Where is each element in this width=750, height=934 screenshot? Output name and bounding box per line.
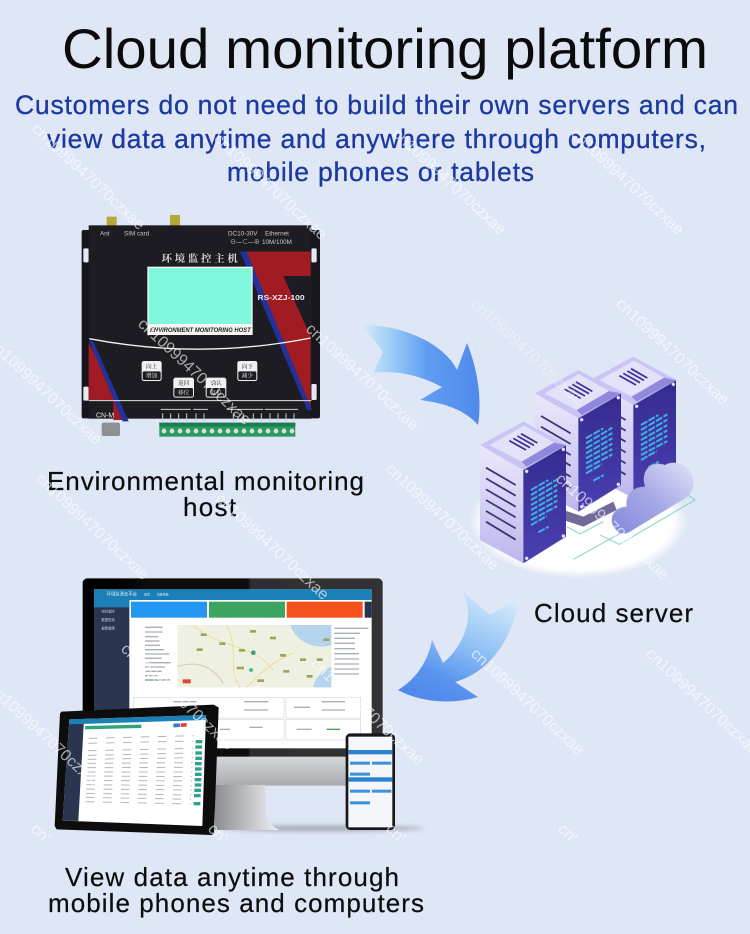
CN-M connector label: CN-M: [96, 412, 114, 419]
port labels: SIM card: [124, 230, 150, 237]
tablet: [55, 705, 219, 835]
watermarks: cn': [204, 820, 230, 847]
dashboard top bar: 功能导航: [157, 591, 169, 596]
tablet sidebar: [63, 719, 84, 821]
monitor stand: [215, 755, 423, 831]
cloud server illustration: [468, 357, 695, 578]
monitor screen dashboard: [94, 589, 372, 748]
watermarks: cn1099947070czxae: [210, 130, 330, 244]
watermarks: cn': [554, 820, 580, 847]
control buttons: 移位: [178, 388, 190, 396]
LCD screen: [147, 267, 253, 335]
watermarks: cn1099947070czxae: [302, 320, 422, 434]
LCD screen: ENVIRONMENT MONITORING HOST: [150, 328, 252, 334]
watermarks: cn1099947070czxae: [389, 125, 509, 239]
control buttons: 向上: [146, 362, 158, 370]
watermarks: cn1099947070czxae: [134, 315, 254, 429]
tablet table rows: [86, 736, 194, 804]
dashboard sidebar: 数据查询: [101, 617, 115, 622]
watermarks: cn1099947070czxae: [212, 490, 332, 604]
watermarks: cn': [382, 820, 408, 847]
port labels: Ethernet: [265, 230, 289, 237]
title: Cloud monitoring platform: [62, 17, 708, 80]
model number: RS-XZJ-100: [257, 293, 305, 302]
watermarks: cn1099947070czxae: [467, 645, 587, 759]
label: environmental monitoring host: host: [183, 492, 237, 522]
control buttons: 减少: [242, 372, 253, 380]
subtitle text block: [15, 90, 738, 187]
watermarks: cn1099947070czxae: [28, 120, 148, 234]
server tower: middle: [535, 370, 622, 512]
watermarks: cn1099947070czxae: [552, 470, 672, 584]
control buttons: 向下: [242, 362, 253, 370]
phone screen: [348, 737, 392, 827]
server tower: front: [480, 422, 567, 563]
control buttons: 增加: [146, 372, 158, 380]
arrow: host to cloud server: [362, 325, 480, 425]
server tower: back: [590, 357, 677, 498]
control buttons: 确认: [210, 379, 222, 387]
port labels: [100, 230, 292, 246]
desktop monitor and devices: [55, 578, 423, 835]
watermarks: cn1099947070czxae: [32, 470, 152, 584]
circuit lines: [567, 494, 695, 559]
label: view data anytime: [48, 862, 424, 918]
smartphone: [346, 733, 395, 830]
CN-M connector label: [96, 412, 120, 436]
label: cloud server: Cloud server: [534, 598, 693, 628]
port labels: 10M/100M: [262, 239, 292, 246]
dashboard sidebar: [94, 600, 129, 710]
subtitle text block: view data anytime and anywhere through computers,: [47, 124, 706, 154]
device body: [89, 225, 311, 419]
dashboard sidebar: 实时监控: [101, 609, 115, 614]
port labels: ⊖—⊂—⊕: [230, 239, 260, 246]
terminal block: [159, 409, 298, 437]
label: environmental monitoring host: Environmental monitoring: [47, 466, 364, 496]
tablet action buttons: [194, 740, 202, 805]
tablet green filter bar: [85, 725, 141, 729]
label: environmental monitoring host: [47, 466, 364, 522]
device list panel: [145, 627, 171, 680]
red and blue corner accents: [89, 252, 312, 421]
dashboard top bar: 环境监测云平台: [107, 591, 137, 598]
subtitle text block: Customers do not need to build their own servers and can: [15, 90, 738, 120]
control buttons: [142, 361, 257, 398]
curved white divider: [89, 338, 311, 349]
watermarks: cn1099947070czxae: [117, 640, 237, 754]
dashboard top bar: 首页: [144, 591, 150, 596]
dashboard sidebar: 报警管理: [101, 625, 115, 630]
monitor bezel: [83, 578, 383, 757]
icon: mounting ears: [82, 230, 320, 418]
device heading: 环境监控主机: [162, 252, 238, 265]
watermarks: cn1099947070czxae: [612, 295, 732, 409]
watermarks: cn1099947070czxae: [382, 460, 502, 574]
dashboard stat cards: [131, 602, 372, 618]
cloud icon: [612, 463, 694, 534]
icon: antennas: [107, 215, 180, 226]
environmental monitoring host device: [82, 215, 320, 437]
device readings panel: [334, 628, 368, 674]
server base shadow: [563, 502, 617, 527]
tablet search buttons: [173, 723, 187, 727]
control buttons: 复位: [210, 388, 222, 396]
dashboard top bar: [94, 589, 372, 600]
control buttons: 返回: [178, 379, 190, 387]
phone section headers: [348, 750, 392, 782]
watermarks: cn1099947070czxae: [567, 125, 687, 239]
port labels: Ant: [100, 230, 110, 237]
white platform disc: [468, 465, 688, 578]
tablet top bar: [69, 715, 206, 724]
watermarks: cn1099947070czxae: [307, 655, 427, 769]
phone value buttons: [350, 762, 391, 804]
map panel: [177, 625, 331, 687]
lower sensor cards: [133, 697, 361, 740]
tablet screen: [63, 715, 206, 826]
watermarks: cn1099947070czxae: [467, 295, 587, 409]
watermarks: [0, 120, 750, 847]
arrow: cloud server to viewing devices: [398, 592, 520, 701]
watermarks: cn': [27, 820, 53, 847]
label: view data anytime: mobile phones and computers: [48, 888, 424, 918]
label: view data anytime: View data anytime through: [65, 862, 399, 892]
subtitle text block: mobile phones or tablets: [227, 157, 534, 187]
port labels: DC10-30V: [228, 230, 258, 237]
